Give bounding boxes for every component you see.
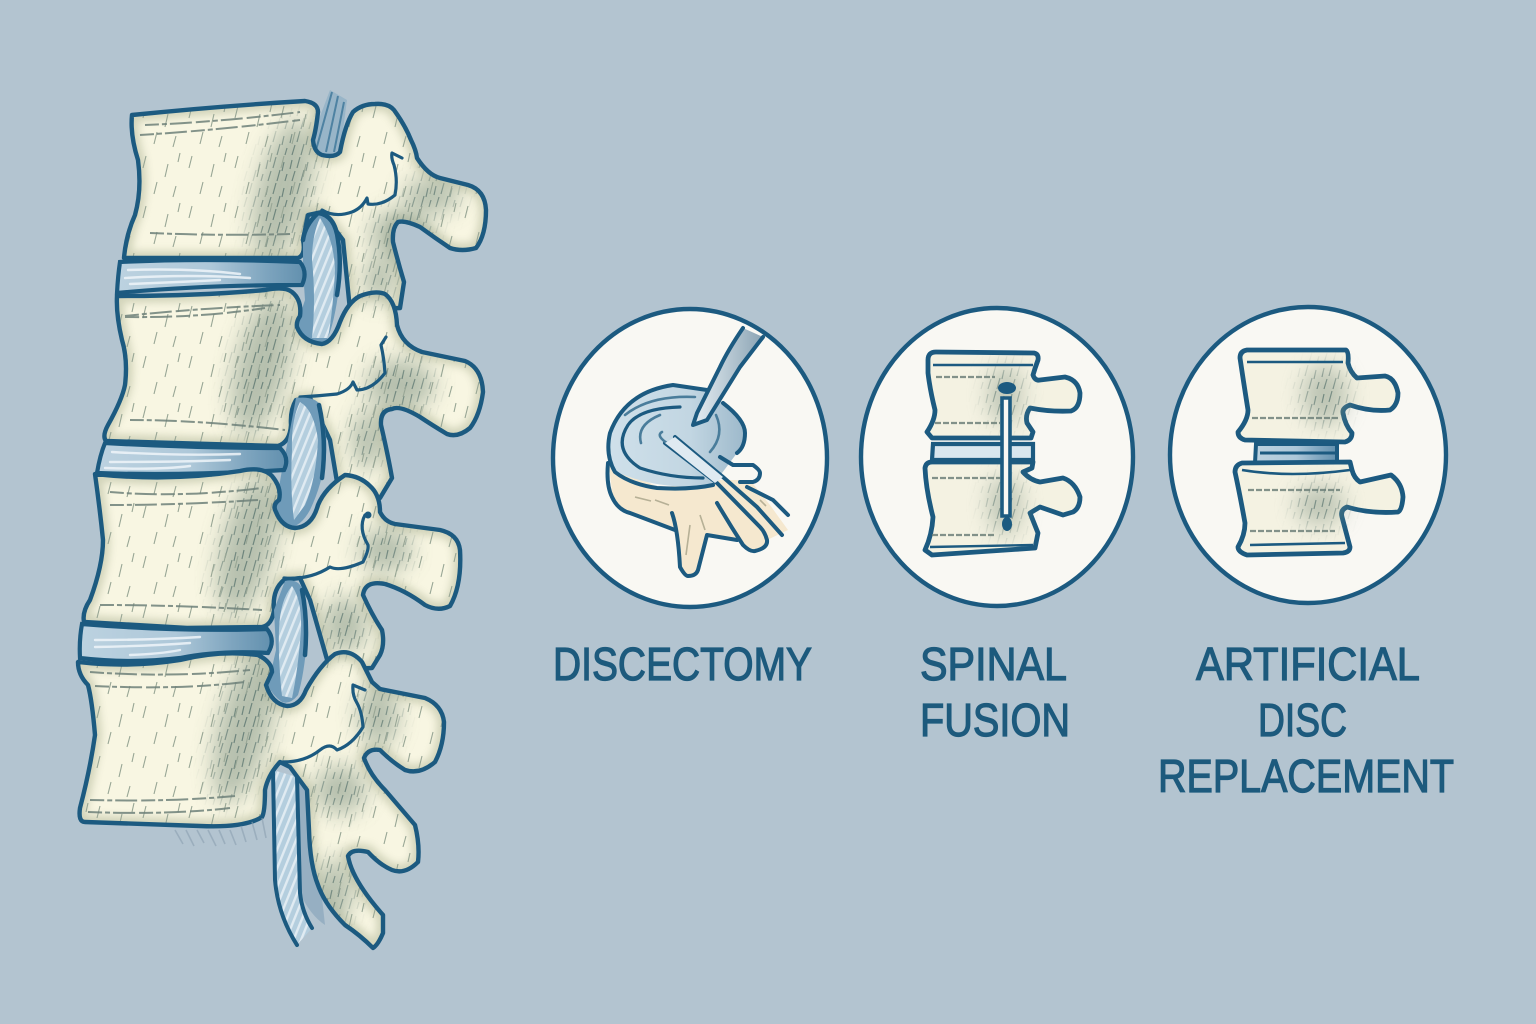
label: artificial disc replacement bbox=[1158, 638, 1454, 802]
label: artificial disc replacement: ARTIFICIAL bbox=[1196, 638, 1420, 690]
icon: fused vertebrae with rod bbox=[925, 352, 1080, 557]
vertebra 1 bbox=[122, 98, 488, 310]
spinal cord strand: top bbox=[310, 90, 347, 156]
vertebra 4 bbox=[70, 640, 450, 950]
panel: spinal fusion bbox=[861, 308, 1133, 606]
neural foramen 3 bbox=[268, 580, 308, 703]
label: artificial disc replacement: DISC bbox=[1258, 694, 1347, 746]
spinal cord strand: bottom bbox=[273, 770, 325, 945]
ligament fibres below vertebra 4 bbox=[175, 818, 266, 846]
intervertebral disc 1 bbox=[117, 260, 305, 293]
panel: artificial disc replacement bbox=[1170, 307, 1446, 603]
circle frame bbox=[1170, 307, 1446, 603]
spine illustration bbox=[70, 80, 500, 950]
panel: discectomy bbox=[553, 309, 827, 607]
neural foramen 1 bbox=[298, 213, 342, 343]
neural foramen 2 bbox=[275, 398, 326, 527]
label: artificial disc replacement: REPLACEMENT bbox=[1158, 750, 1454, 802]
label: discectomy: DISCECTOMY bbox=[553, 638, 812, 690]
icon: lumbar vertebra with disc and instrument bbox=[608, 328, 788, 576]
circle frame bbox=[553, 309, 827, 607]
instrument bbox=[696, 328, 761, 422]
intervertebral disc 2 bbox=[97, 443, 286, 474]
intervertebral disc 3 bbox=[80, 624, 272, 661]
vertebra 3 bbox=[81, 467, 462, 670]
label: spinal fusion: SPINAL bbox=[920, 638, 1067, 690]
vertebra 2 bbox=[102, 287, 486, 500]
disc rings bbox=[622, 407, 703, 478]
label: spinal fusion: FUSION bbox=[920, 694, 1070, 746]
fixation rod and screws bbox=[998, 382, 1016, 531]
label: spinal fusion bbox=[920, 638, 1070, 746]
forceps highlight bbox=[665, 437, 723, 483]
icon: vertebrae with artificial disc bbox=[1235, 350, 1405, 555]
circle frame bbox=[861, 308, 1133, 606]
